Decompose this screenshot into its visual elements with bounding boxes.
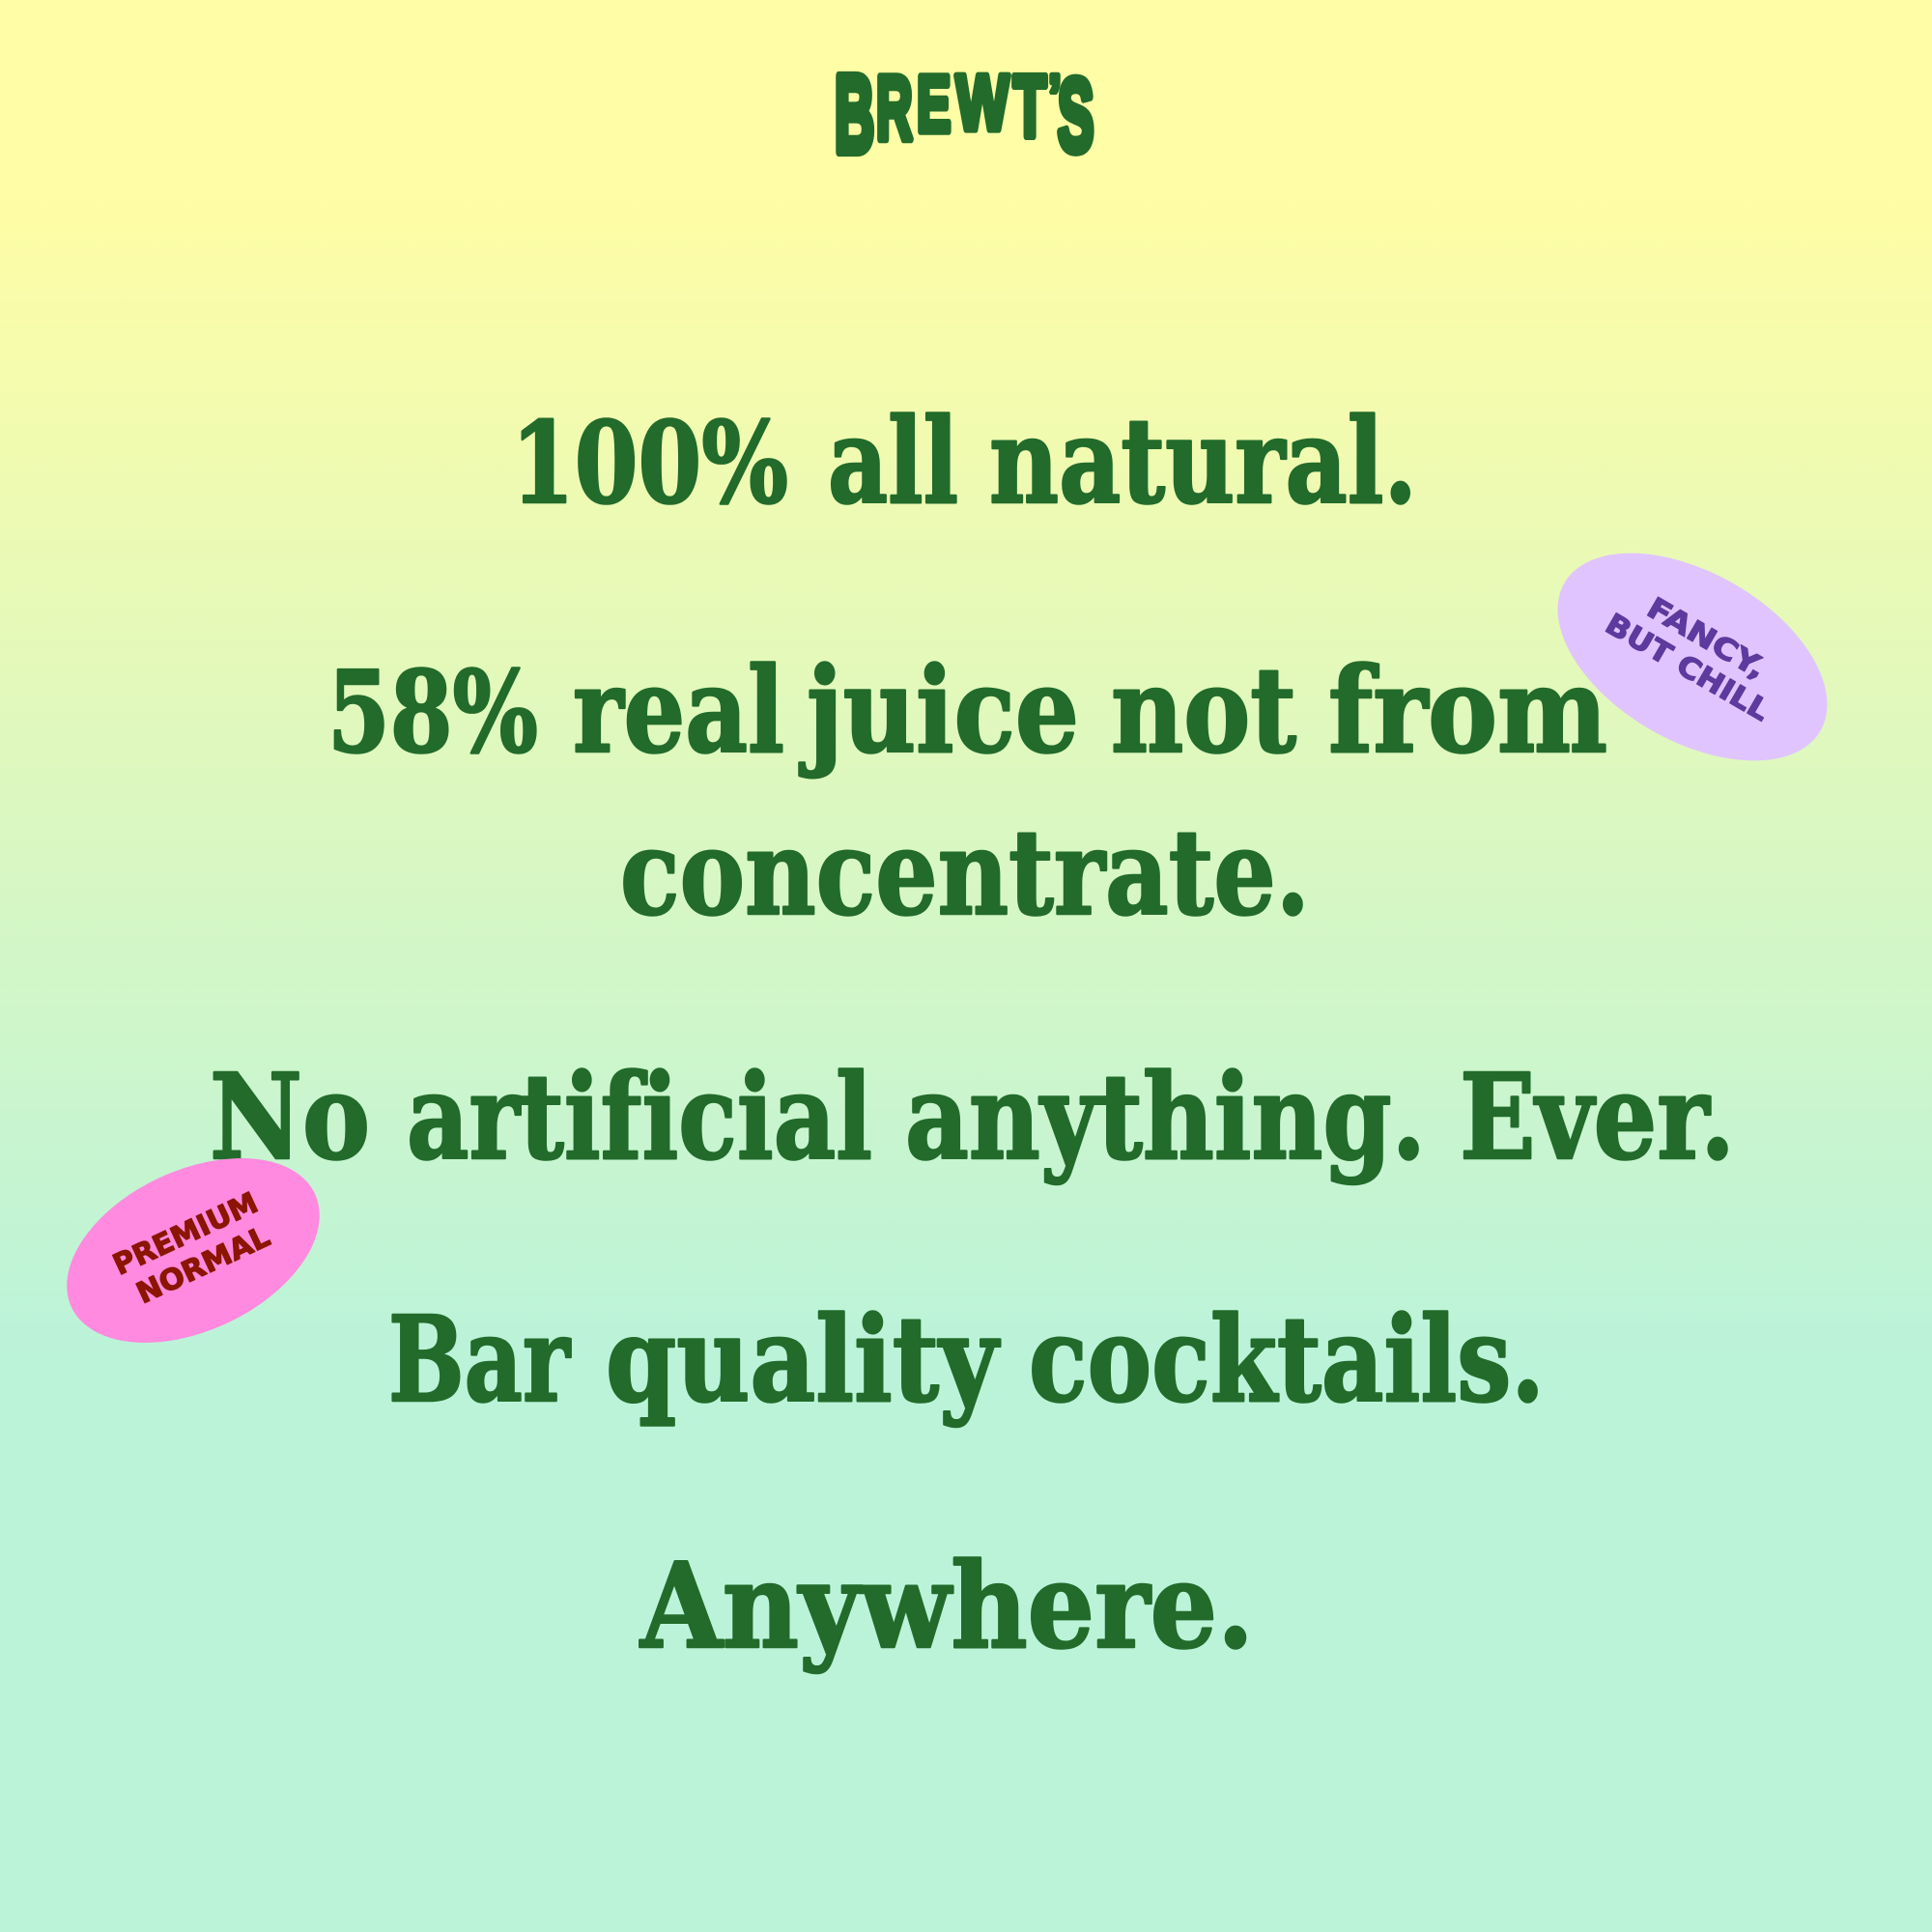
sticker: fancy, but chill — [1522, 510, 1862, 804]
logo: BREWT'S: E — [917, 59, 951, 149]
statement: 58% real juice not from concentrate: 58% — [327, 647, 538, 779]
sticker: fancy, but chill: BUT CHILL — [1600, 608, 1776, 728]
statement: No artificial anything. Ever.: artificial — [407, 1047, 872, 1186]
sticker: premium normal — [38, 1122, 349, 1379]
statement: 58% real juice not from concentrate: concentrate. — [620, 803, 1310, 942]
statement: 58% real juice not from concentrate: real — [573, 640, 784, 780]
logo: BREWT'S — [835, 53, 1094, 175]
logo: BREWT'S: W — [956, 58, 1009, 146]
statement: 100% all natural — [511, 391, 1417, 530]
statement: 58% real juice not from concentrate: not — [1111, 640, 1296, 780]
logo: BREWT'S: S — [1058, 59, 1094, 174]
statement: No artificial anything. Ever.: anything. — [905, 1047, 1426, 1186]
logo: BREWT'S: R — [876, 58, 913, 159]
logo: BREWT'S: T — [1013, 57, 1046, 155]
statement: 100% all natural: natural. — [989, 391, 1417, 530]
statement: 100% all natural: all — [828, 391, 958, 530]
statement: Anywhere.: Anywhere. — [639, 1536, 1254, 1675]
logo: BREWT'S: ’ — [1048, 62, 1062, 129]
statement: No artificial anything. Ever.: Ever. — [1460, 1047, 1735, 1186]
statement: No artificial anything. Ever. — [210, 1047, 1735, 1186]
sticker: premium normal: PREMIUM — [108, 1186, 264, 1283]
statement: Bar quality cocktails.: cocktails. — [1029, 1290, 1545, 1429]
statement: 100% all natural: 100% — [511, 398, 788, 529]
statement: No artificial anything. Ever.: No — [210, 1047, 370, 1186]
statement: Bar quality cocktails.: Bar — [388, 1290, 571, 1429]
sticker: premium normal: NORMAL — [131, 1220, 275, 1311]
statement: Bar quality cocktails. — [388, 1290, 1545, 1429]
statement: Bar quality cocktails.: quality — [606, 1290, 1001, 1429]
logo: BREWT'S: B — [835, 53, 874, 175]
statement: 58% real juice not from concentrate: from — [1328, 640, 1607, 780]
statement: 58% real juice not from concentrate — [327, 640, 1607, 942]
sticker: fancy, but chill: FANCY, — [1641, 591, 1772, 686]
statement: 58% real juice not from concentrate: juice — [798, 640, 1079, 780]
